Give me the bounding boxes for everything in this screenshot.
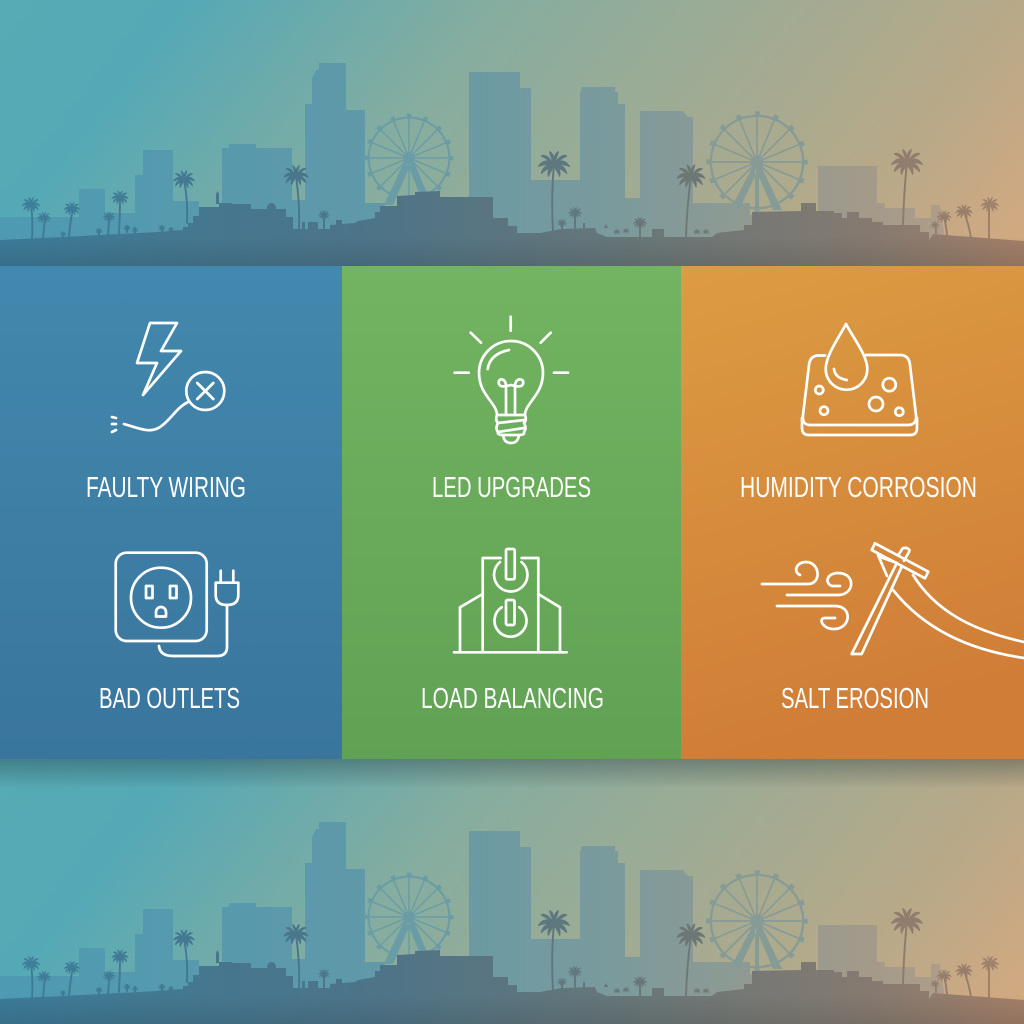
label: load balancing: LOAD BALANCING bbox=[421, 683, 604, 715]
icon: bad outlet bbox=[116, 553, 238, 656]
top skyline banner bbox=[0, 0, 1024, 266]
icon: load balancing bbox=[454, 549, 567, 652]
icon: wind and leaning pole bbox=[762, 543, 1024, 658]
bottom skyline banner bbox=[0, 759, 1024, 1024]
label: LED upgrades: LED UPGRADES bbox=[432, 472, 591, 504]
panel: electrical problems (blue) bbox=[0, 266, 342, 759]
panel: coastal hazards (orange) bbox=[681, 266, 1024, 759]
icon: humidity corrosion bbox=[802, 324, 917, 435]
label: salt erosion: SALT EROSION bbox=[781, 683, 929, 715]
label: faulty wiring: FAULTY WIRING bbox=[86, 472, 246, 504]
icon: light bulb bbox=[455, 317, 568, 443]
panel: upgrades (green) bbox=[342, 266, 681, 759]
icon: faulty wiring bbox=[112, 323, 224, 432]
label: bad outlets: BAD OUTLETS bbox=[99, 683, 240, 715]
